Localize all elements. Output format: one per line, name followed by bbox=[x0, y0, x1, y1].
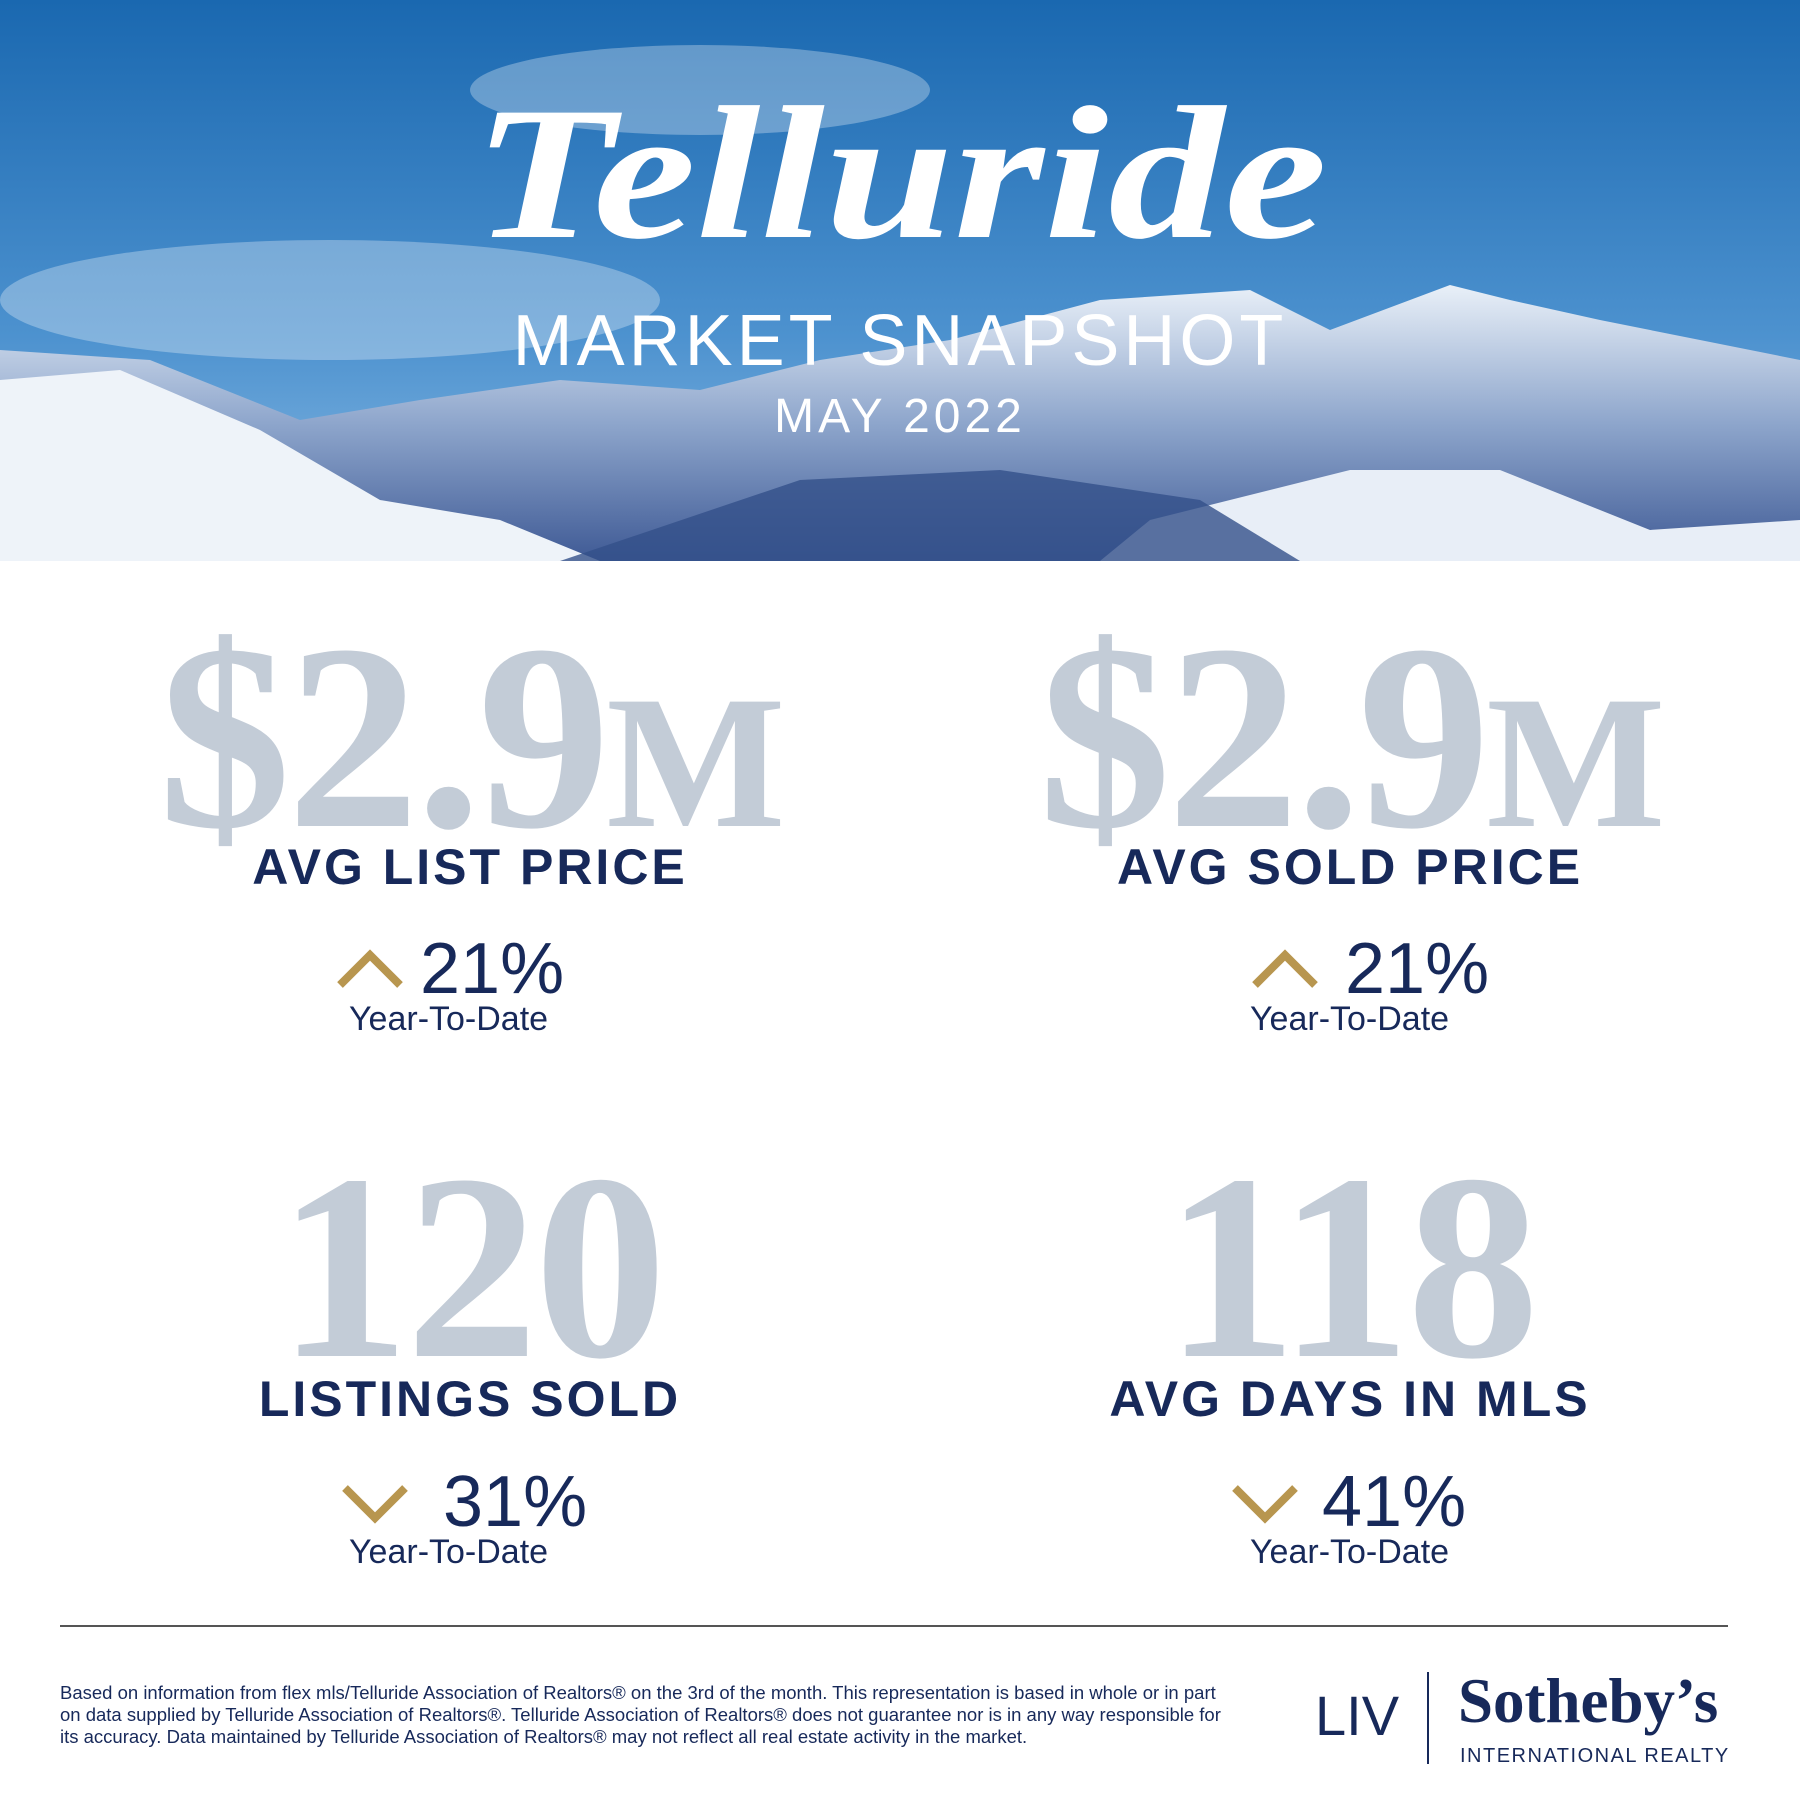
big number: 118 bbox=[1165, 1121, 1535, 1414]
change: 31% bbox=[443, 1462, 587, 1542]
period: Year-To-Date bbox=[349, 1000, 548, 1038]
period: Year-To-Date bbox=[1250, 1000, 1449, 1038]
logo bbox=[1315, 1666, 1730, 1767]
period: Year-To-Date bbox=[1250, 1533, 1449, 1571]
logo: LIV bbox=[1315, 1684, 1399, 1747]
big number: $2.9M bbox=[1038, 591, 1662, 884]
icon: down chevron bbox=[1232, 1485, 1298, 1524]
label: LISTINGS SOLD bbox=[259, 1371, 681, 1427]
icon: down chevron bbox=[342, 1485, 408, 1524]
label: AVG DAYS IN MLS bbox=[1109, 1371, 1591, 1427]
title: Telluride bbox=[473, 69, 1327, 279]
panel: avg days in mls bbox=[1109, 1121, 1591, 1571]
label: AVG LIST PRICE bbox=[252, 839, 688, 895]
logo: INTERNATIONAL REALTY bbox=[1460, 1745, 1730, 1767]
footer disclaimer: Based on information from flex mls/Telluride Association of Realtors® on the 3rd of the month. This representation is based in whole or in part on data supplied by Telluride Association of Realtors®. Telluride Association of Realtors® does not guarantee nor is in any way responsible for its accuracy. Data maintained by Telluride Association of Realtors® may not reflect all real estate activity in the market. bbox=[60, 1682, 1221, 1747]
panel: listings sold bbox=[259, 1121, 681, 1571]
change: 21% bbox=[420, 929, 564, 1009]
label: AVG SOLD PRICE bbox=[1117, 839, 1583, 895]
change: 41% bbox=[1322, 1462, 1466, 1542]
big number: 120 bbox=[277, 1121, 663, 1414]
icon: up chevron bbox=[1252, 950, 1318, 988]
change: 21% bbox=[1345, 929, 1489, 1009]
date: MAY 2022 bbox=[774, 390, 1026, 443]
big number: $2.9M bbox=[158, 591, 782, 884]
period: Year-To-Date bbox=[349, 1533, 548, 1571]
subtitle: MARKET SNAPSHOT bbox=[513, 301, 1287, 381]
logo: Sotheby’s bbox=[1458, 1666, 1718, 1736]
header: mountain photo background bbox=[0, 0, 1800, 561]
panel: avg list price bbox=[158, 591, 782, 1038]
panel: avg sold price bbox=[1038, 591, 1662, 1038]
icon: up chevron bbox=[337, 950, 403, 988]
